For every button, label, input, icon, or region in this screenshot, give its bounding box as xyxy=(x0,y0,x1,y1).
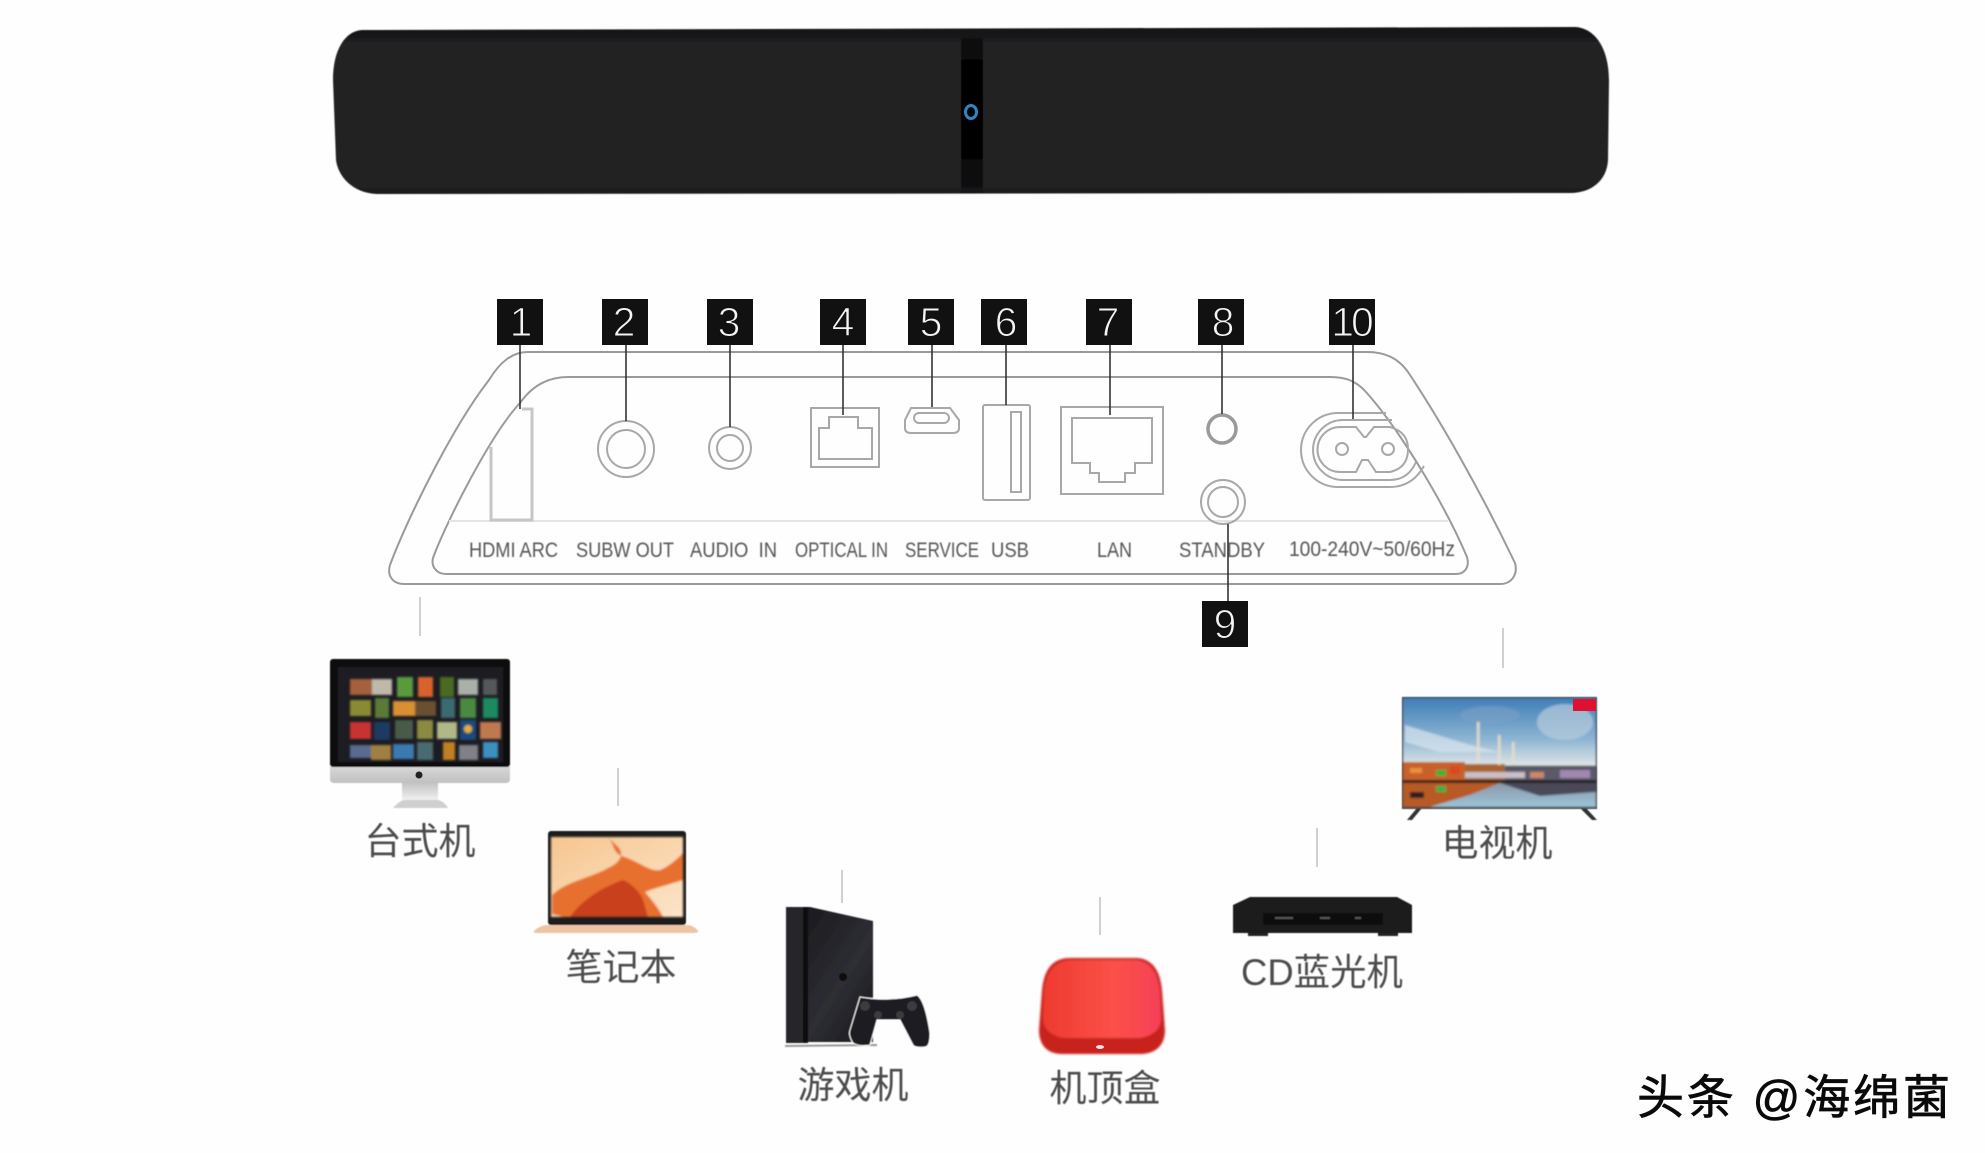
port: OPTICAL IN xyxy=(795,408,888,562)
connector tick: laptop xyxy=(617,768,619,806)
port: SERVICE xyxy=(905,408,979,562)
icon: game console and controller xyxy=(785,907,930,1047)
number tag 9 xyxy=(1202,524,1248,647)
port: HDMI ARC xyxy=(469,409,558,562)
number tag 3: 3 xyxy=(718,299,740,345)
port: SUBW OUT xyxy=(576,421,674,562)
port: AUDIO IN: AUDIO IN xyxy=(690,539,777,562)
number tag 1 xyxy=(497,299,543,409)
icon: blue status ring xyxy=(966,106,976,118)
port: power inlet xyxy=(1289,413,1455,561)
number tag 6 xyxy=(981,299,1027,405)
number tag 2: 2 xyxy=(613,299,635,345)
label: television: 电视机 xyxy=(1442,823,1552,864)
label: laptop: 笔记本 xyxy=(566,947,676,988)
icon: desktop computer xyxy=(330,659,510,808)
icon: set-top box xyxy=(1039,958,1165,1054)
port: USB: USB xyxy=(991,539,1029,562)
number tag 3 xyxy=(707,299,753,427)
watermark: 头条 @海绵菌 xyxy=(1637,1071,1950,1124)
port: AUDIO IN xyxy=(690,427,777,562)
number tag 10 xyxy=(1329,299,1375,419)
number tag 6: 6 xyxy=(995,299,1017,345)
icon: laptop xyxy=(534,831,698,933)
port: USB xyxy=(983,405,1030,562)
port: power inlet: 100-240V~50/60Hz xyxy=(1289,538,1455,561)
connector tick: game console xyxy=(841,870,843,903)
icon: CD Blu-ray player xyxy=(1233,897,1412,936)
port: STANDBY xyxy=(1179,480,1265,562)
connector tick: TV xyxy=(1502,628,1504,668)
soundbar xyxy=(333,27,1609,194)
number tag 8: 8 xyxy=(1212,299,1234,345)
number tag 4 xyxy=(820,299,866,415)
number tag 9: 9 xyxy=(1214,601,1236,647)
port: LAN xyxy=(1061,407,1163,562)
connector tick: set-top box xyxy=(1099,897,1101,935)
port: OPTICAL IN: OPTICAL IN xyxy=(795,539,888,562)
number tag 7: 7 xyxy=(1097,299,1119,345)
port: SERVICE: SERVICE xyxy=(905,539,979,562)
port: HDMI ARC: HDMI ARC xyxy=(469,539,558,562)
number tag 8 xyxy=(1198,299,1244,414)
port: SUBW OUT: SUBW OUT xyxy=(576,539,674,562)
port: LAN: LAN xyxy=(1097,539,1132,562)
label: desktop: 台式机 xyxy=(364,821,476,862)
icon: television xyxy=(1402,697,1597,820)
label: CD player: CD蓝光机 xyxy=(1241,952,1403,993)
connector tick: CD player xyxy=(1316,828,1318,867)
number tag 5 xyxy=(908,299,954,407)
label: game console: 游戏机 xyxy=(798,1065,908,1106)
label: set-top box: 机顶盒 xyxy=(1050,1068,1160,1109)
number tag 5: 5 xyxy=(920,299,942,345)
number tag 4: 4 xyxy=(832,299,854,345)
rear panel outline xyxy=(389,352,1516,584)
port: button 8 xyxy=(1208,415,1236,443)
number tag 7 xyxy=(1086,299,1132,415)
port: STANDBY: STANDBY xyxy=(1179,539,1265,562)
number tag 2 xyxy=(602,299,648,421)
number tag 10: 10 xyxy=(1331,299,1373,345)
connector tick: desktop xyxy=(419,597,421,636)
number tag 1: 1 xyxy=(510,299,532,345)
